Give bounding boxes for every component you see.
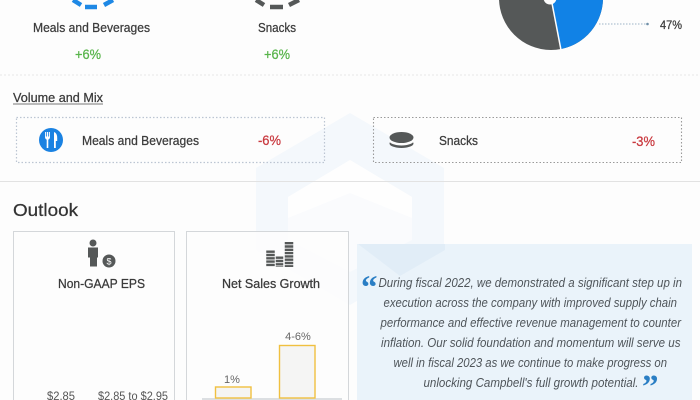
value: -6%: [258, 133, 281, 148]
icon: person with coin: [88, 240, 116, 268]
bar chart: [202, 331, 342, 400]
quote text: During fiscal 2022, we demonstrated a significant step up in: [378, 276, 682, 290]
bar: fiscal 2022: [216, 387, 251, 398]
pie leader line: [599, 23, 649, 25]
watermark logo: [256, 113, 444, 305]
quote text: unlocking Campbell's full growth potential.: [424, 376, 638, 390]
panel: snacks volume: [374, 118, 682, 162]
opening quote mark: “: [361, 270, 378, 306]
heading: volume and mix: Volume and Mix: [13, 91, 104, 105]
icon: fork and knife: [39, 128, 63, 152]
value: snacks growth: +6%: [264, 47, 290, 62]
bar label: 4-6%: 4-6%: [285, 331, 311, 343]
panel: meals volume: [16, 118, 324, 162]
panel: net sales growth: [186, 232, 348, 400]
quote text: inflation. Our solid foundation and momentum will serve us: [381, 336, 680, 350]
panel: CEO quote: [357, 244, 692, 400]
title: Net Sales Growth: [222, 277, 320, 291]
quote text: well in fiscal 2023 as we continue to make progress on: [394, 356, 667, 370]
bar label: 1%: 1%: [224, 374, 240, 386]
ring: meals and beverages: [73, 0, 113, 7]
icon: coin stacks: [270, 242, 289, 267]
pie chart: [499, 0, 603, 50]
label: meals and beverages sales: Meals and Beverages: [33, 21, 150, 35]
icon: person with coin: $: [106, 256, 112, 266]
quote text: [378, 276, 682, 390]
icon: cookie: [390, 132, 414, 148]
label: Meals and Beverages: [82, 134, 199, 148]
bar: fiscal 2023: [280, 346, 315, 398]
pie label: 47%: [660, 20, 682, 32]
quote text: execution across the company with improved supply chain: [384, 296, 677, 310]
panel: non-GAAP EPS: [14, 232, 174, 400]
quote text: performance and effective revenue management to counter: [380, 316, 682, 330]
title: Non-GAAP EPS: [58, 277, 145, 291]
value: -3%: [632, 134, 655, 149]
ring: snacks: [256, 0, 299, 7]
heading: outlook: Outlook: [13, 200, 78, 220]
label: Snacks: [439, 134, 478, 148]
label: snacks sales: Snacks: [258, 21, 296, 35]
value: meals growth: +6%: [75, 47, 101, 62]
